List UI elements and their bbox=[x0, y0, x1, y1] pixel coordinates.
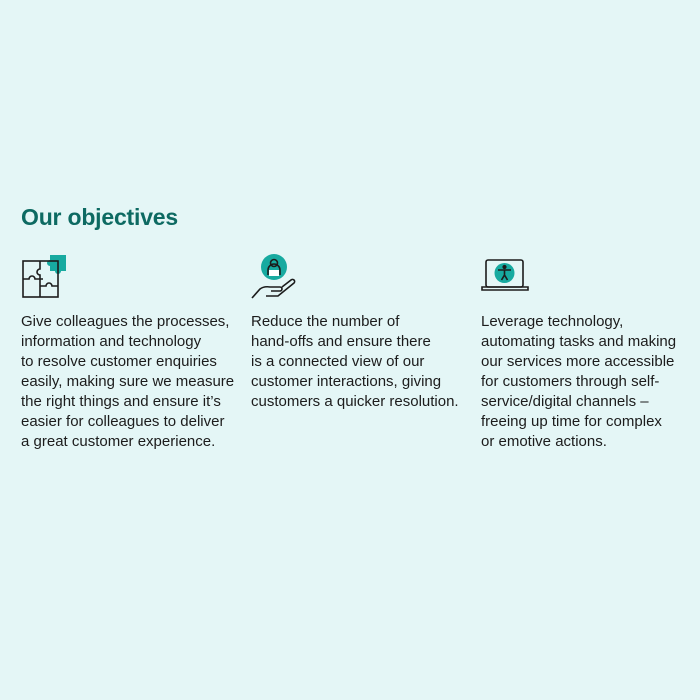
text: column 3: Leverage technology, bbox=[481, 313, 623, 330]
title: Our objectives bbox=[21, 204, 178, 230]
text: column 2: Reduce the number of bbox=[251, 313, 399, 330]
text: column 3: our services more accessible bbox=[481, 353, 674, 370]
text: column 1: Give colleagues the processes, bbox=[21, 313, 229, 330]
text: column 2: customer interactions, giving bbox=[251, 373, 441, 390]
text: column 3: or emotive actions. bbox=[481, 433, 607, 450]
text: column 3: service/digital channels – bbox=[481, 393, 649, 410]
icon: hand with person bbox=[252, 254, 296, 298]
text: column 3: automating tasks and making bbox=[481, 333, 676, 350]
text: column 2 bbox=[251, 313, 459, 410]
text: column 2: hand-offs and ensure there bbox=[251, 333, 431, 350]
text: column 1: easier for colleagues to deliver bbox=[21, 413, 224, 430]
text: column 1: to resolve customer enquiries bbox=[21, 353, 217, 370]
text: column 2: is a connected view of our bbox=[251, 353, 424, 370]
text: column 1 bbox=[21, 313, 234, 450]
text: column 1: a great customer experience. bbox=[21, 433, 215, 450]
icon: puzzle bbox=[22, 255, 66, 298]
text: column 1: information and technology bbox=[21, 333, 201, 350]
text: column 2: customers a quicker resolution. bbox=[251, 393, 459, 410]
text: column 3: for customers through self- bbox=[481, 373, 659, 390]
text: column 1: easily, making sure we measure bbox=[21, 373, 234, 390]
text: column 3: freeing up time for complex bbox=[481, 413, 662, 430]
icon: laptop accessibility bbox=[481, 259, 529, 291]
text: column 1: the right things and ensure it’s bbox=[21, 393, 221, 410]
text: column 3 bbox=[481, 313, 676, 450]
